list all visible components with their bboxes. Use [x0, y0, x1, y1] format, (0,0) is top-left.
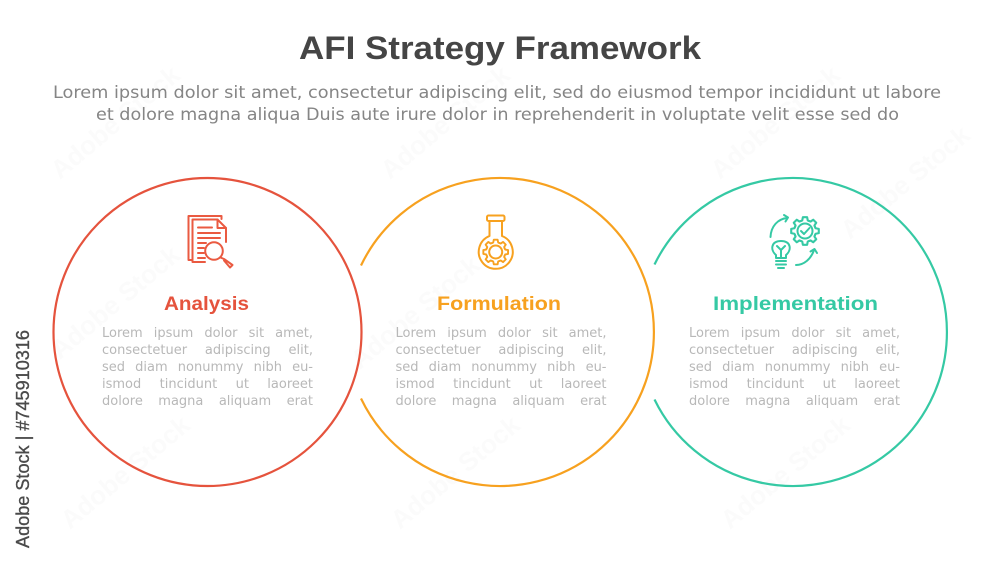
subtitle: [53, 83, 941, 125]
watermark: stock id: Adobe Stock | #745910316: [12, 330, 33, 548]
text: Adobe Stock: [45, 239, 186, 365]
text block: implementation: Lorem ipsum dolor sit amet,: [689, 326, 900, 341]
text block: analysis: Lorem ipsum dolor sit amet,: [102, 326, 313, 341]
text block: formulation: Lorem ipsum dolor sit amet,: [396, 326, 606, 341]
text block: implementation: ismod tincidunt ut laoreet: [689, 377, 900, 392]
text: Adobe Stock: [345, 249, 486, 375]
heading: formulation: Formulation: [437, 293, 561, 315]
text block: analysis: sed diam nonummy nibh eu-: [102, 360, 313, 375]
subtitle: et dolore magna aliqua Duis aute irure dolor in reprehenderit in voluptate velit esse sed do: [96, 105, 899, 125]
icon: gear, bulb and cycle arrows: [770, 215, 819, 268]
text: Adobe Stock: [385, 409, 526, 535]
text block: implementation: sed diam nonummy nibh eu-: [689, 360, 900, 375]
text block: implementation: dolore magna aliquam erat: [689, 394, 900, 409]
text: Adobe Stock: [705, 59, 846, 185]
text block: formulation: [396, 326, 606, 409]
arc: implementation ring: [654, 178, 947, 486]
text block: analysis: consectetuer adipiscing elit,: [102, 343, 313, 358]
text: Adobe Stock: [375, 59, 516, 185]
text block: implementation: consectetuer adipiscing elit,: [689, 343, 900, 358]
text block: formulation: ismod tincidunt ut laoreet: [396, 377, 606, 392]
text block: formulation: sed diam nonummy nibh eu-: [396, 360, 606, 375]
icon: flask with gear: [479, 216, 513, 269]
text block: implementation: [689, 326, 900, 409]
icon: document with magnifier: [188, 216, 232, 268]
text block: analysis: dolore magna aliquam erat: [102, 394, 313, 409]
text: Adobe Stock: [45, 59, 186, 185]
text block: analysis: [102, 326, 313, 409]
text: Adobe Stock: [715, 409, 856, 535]
circle: analysis ring: [54, 178, 362, 486]
text block: formulation: dolore magna aliquam erat: [396, 394, 606, 409]
text block: analysis: ismod tincidunt ut laoreet: [102, 377, 313, 392]
title: AFI Strategy Framework: [299, 30, 701, 66]
heading: analysis: Analysis: [164, 293, 249, 315]
heading: implementation: Implementation: [713, 293, 878, 315]
text: Adobe Stock: [835, 119, 976, 245]
text block: formulation: consectetuer adipiscing elit,: [396, 343, 606, 358]
arc: formulation ring: [361, 178, 654, 486]
subtitle: Lorem ipsum dolor sit amet, consectetur adipiscing elit, sed do eiusmod tempor incididunt ut labore: [53, 83, 941, 103]
text: Adobe Stock: [55, 409, 196, 535]
